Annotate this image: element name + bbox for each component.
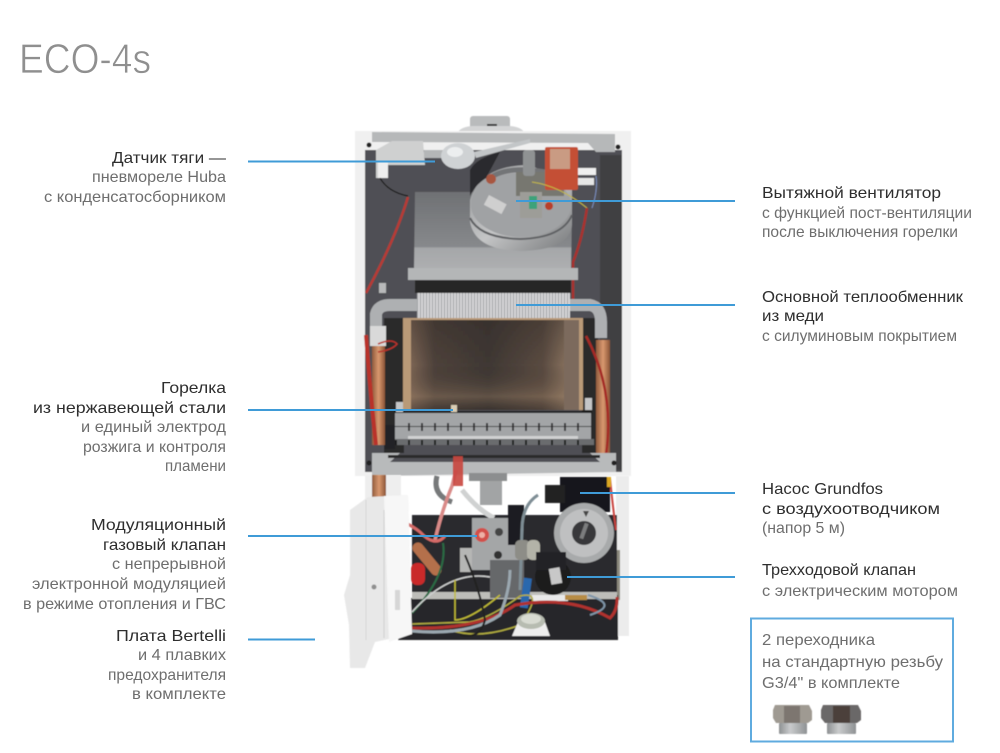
bottom connector: [512, 613, 550, 636]
control board hinged cover: [344, 495, 412, 668]
label: gas valve: электронной модуляцией: [32, 576, 226, 593]
adapters text: 2 переходника: [762, 632, 875, 649]
copper tube and red cap: [411, 548, 472, 585]
exhaust fan: [470, 147, 596, 251]
lower frame bar: [366, 453, 616, 476]
line: gas valve: [248, 535, 477, 537]
label: pump: [762, 481, 940, 537]
label: three-way valve: с электрическим мотором: [762, 583, 958, 600]
label: draft sensor: [44, 150, 226, 206]
label: exhaust fan: после выключения горелки: [762, 224, 958, 241]
three-way valve: [520, 552, 571, 608]
label: draft sensor: пневмореле Huba: [92, 169, 226, 186]
callout lines: [248, 162, 735, 640]
label: gas valve: [23, 517, 226, 613]
label: pump: с воздухоотводчиком: [762, 501, 940, 518]
gas pipe and manifold: [435, 456, 507, 540]
label: heat exchanger: из меди: [762, 308, 824, 325]
adapters text: на стандартную резьбу: [762, 654, 943, 671]
lower compartment: [344, 456, 629, 668]
label: burner: [33, 380, 227, 475]
panel: adapters: [751, 618, 953, 742]
label: draft sensor: Датчик тяги —: [112, 150, 226, 167]
red wires: [366, 197, 587, 300]
label: control board: предохранителя: [108, 667, 226, 684]
line: draft sensor: [248, 160, 435, 162]
label: exhaust fan: Вытяжной вентилятор: [762, 185, 941, 202]
modulating gas valve: [472, 505, 524, 598]
label: three-way valve: Трехходовой клапан: [762, 562, 916, 579]
label: burner: Горелка: [161, 380, 226, 397]
line: fan: [516, 200, 735, 202]
label: burner: пламени: [165, 458, 226, 475]
stainless steel burner: [385, 398, 594, 449]
icon: adapter fitting 2: [821, 705, 861, 734]
wiring: [381, 477, 617, 636]
title: ECO-4s: [19, 35, 151, 82]
label: control board: и 4 плавких: [138, 647, 226, 664]
label: control board: [108, 628, 226, 703]
heat exchanger back plate: [414, 192, 572, 270]
dark rear panel and bottom tray: [398, 515, 618, 640]
line: pump: [580, 492, 735, 494]
icon: adapter fitting 1: [773, 705, 812, 734]
line: heat exchanger: [516, 304, 735, 306]
grundfos pump: [515, 477, 614, 590]
adapters text: [762, 632, 943, 692]
boiler casing: [355, 131, 631, 476]
label: exhaust fan: [762, 185, 972, 241]
line: control board: [248, 638, 315, 640]
label: heat exchanger: [762, 289, 964, 345]
label: heat exchanger: Основной теплообменник: [762, 289, 964, 306]
main heat exchanger: [408, 268, 578, 318]
copper pipes and hydraulic connections: [366, 283, 610, 455]
label: burner: розжига и контроля: [83, 439, 226, 456]
label: control board: в комплекте: [132, 686, 226, 703]
combustion chamber: [403, 318, 583, 410]
label: heat exchanger: с силуминовым покрытием: [762, 328, 957, 345]
pressure switch: [376, 139, 530, 196]
side rails: [365, 475, 629, 636]
label: gas valve: Модуляционный: [91, 517, 226, 534]
label: gas valve: с непрерывной: [112, 556, 226, 573]
flue outlet: [458, 116, 524, 132]
label: pump: (напор 5 м): [762, 520, 845, 537]
label: burner: и единый электрод: [81, 419, 227, 436]
label: gas valve: газовый клапан: [103, 537, 226, 554]
label: draft sensor: с конденсатосборником: [44, 189, 226, 206]
label: exhaust fan: с функцией пост-вентиляции: [762, 205, 972, 222]
boiler illustration: [355, 116, 631, 476]
label: control board: Плата Bertelli: [116, 628, 226, 645]
label: burner: из нержавеющей стали: [33, 400, 226, 417]
line: three-way valve: [567, 576, 735, 578]
label: pump: Насос Grundfos: [762, 481, 883, 498]
label: three-way valve: [762, 562, 958, 600]
adapters text: G3/4" в комплекте: [762, 675, 900, 692]
label: gas valve: в режиме отопления и ГВС: [23, 596, 226, 613]
line: burner: [248, 409, 453, 411]
